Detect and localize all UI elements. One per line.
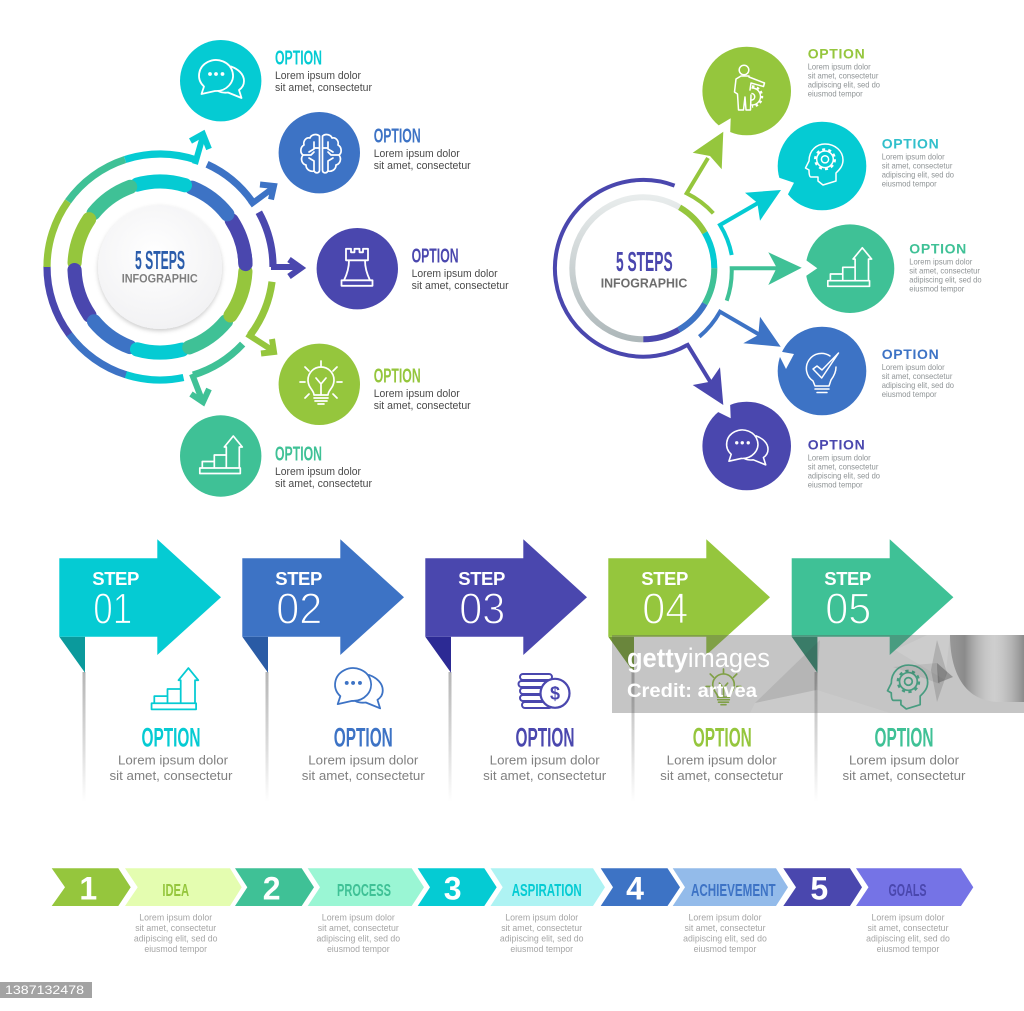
- option 3 text: Lorem ipsum dolor: [412, 268, 498, 280]
- step 1: OPTION: [142, 723, 200, 753]
- step 3: $: [550, 684, 560, 704]
- chevron 4 achievement: eiusmod tempor: [694, 944, 756, 955]
- node 5 text: eiusmod tempor: [808, 480, 863, 490]
- arrow: to node 1: [687, 132, 723, 213]
- step 2: OPTION: [334, 723, 393, 753]
- step 1: 01: [93, 584, 132, 633]
- option 3 circle with rook icon: [317, 228, 398, 309]
- step 1: Lorem ipsum dolor: [118, 752, 229, 767]
- chevron 2 process: adipiscing elit, sed do: [316, 934, 400, 945]
- chevron 5 goals: eiusmod tempor: [877, 944, 939, 955]
- step 3: OPTION: [516, 723, 574, 753]
- chevron 3 aspiration: ASPIRATION: [512, 880, 582, 900]
- option 2 text: [374, 125, 471, 172]
- chevron 5 goals: adipiscing elit, sed do: [866, 934, 950, 945]
- node 2 text: OPTION: [882, 135, 939, 151]
- chevron 5 goals: sit amet, consectetur: [868, 923, 948, 934]
- step 4: OPTION: [693, 723, 752, 753]
- node 3 text: OPTION: [909, 241, 966, 257]
- step 5: sit amet, consectetur: [842, 768, 966, 783]
- option 3 text: [412, 244, 509, 292]
- chevron 3 aspiration: 3: [444, 870, 462, 906]
- panel: circular diagram left: [0, 40, 509, 497]
- option 5 text: OPTION: [275, 443, 322, 466]
- node 3 circle with chart icon: [803, 224, 894, 313]
- chevron 4 achievement: 4: [626, 870, 644, 906]
- step 2: [242, 539, 425, 802]
- chevron 2 process: eiusmod tempor: [327, 944, 390, 955]
- chevron 2 process: [235, 868, 424, 955]
- node 4 text: [882, 346, 954, 399]
- chevron 2 process: Lorem ipsum dolor: [322, 913, 395, 924]
- option 5 text: sit amet, consectetur: [275, 478, 372, 490]
- chevron 1 idea: sit amet, consectetur: [135, 923, 216, 934]
- chevron 3 aspiration: sit amet, consectetur: [501, 923, 582, 934]
- step 5: Lorem ipsum dolor: [849, 752, 960, 767]
- chevron 4 achievement: Lorem ipsum dolor: [688, 913, 762, 924]
- node 4 circle with check bulb icon: [777, 327, 866, 415]
- node 3 text: eiusmod tempor: [909, 284, 965, 294]
- step 4: 04: [642, 584, 688, 633]
- step 3: [425, 539, 607, 802]
- chevron 1 idea: [52, 868, 242, 955]
- chevron 4 achievement: sit amet, consectetur: [684, 923, 766, 934]
- chevron 5 goals: GOALS: [888, 880, 926, 900]
- option 4 text: [374, 365, 471, 412]
- node 2 circle with head gear icon: [777, 122, 866, 210]
- step 5: 05: [825, 584, 871, 633]
- step 3: 03: [459, 584, 505, 633]
- option 5 text: Lorem ipsum dolor: [275, 466, 361, 478]
- step 3: STEP: [458, 568, 505, 589]
- option 3 text: OPTION: [412, 244, 459, 267]
- option 5 circle with chart icon: [180, 415, 261, 497]
- node 5 text: OPTION: [808, 437, 865, 453]
- node 1 text: Lorem ipsum dolor: [808, 61, 871, 71]
- right ring: [523, 148, 764, 389]
- image id tag: 1387132478: [5, 985, 84, 997]
- right center title: [601, 246, 688, 290]
- chevron 4 achievement: ACHIEVEMENT: [691, 880, 776, 900]
- option 4 text: OPTION: [374, 365, 421, 388]
- step 4: STEP: [641, 568, 688, 589]
- arrow: to option 5: [191, 374, 209, 402]
- node 2 text: Lorem ipsum dolor: [882, 151, 945, 161]
- chevron 1 idea: Lorem ipsum dolor: [139, 913, 212, 924]
- node 3 text: adipiscing elit, sed do: [909, 275, 982, 285]
- center disc: [98, 205, 222, 329]
- chevron 1 idea: adipiscing elit, sed do: [134, 934, 218, 945]
- option 1 text: OPTION: [275, 46, 322, 69]
- step 1: sit amet, consectetur: [110, 768, 233, 783]
- step 1: [59, 539, 233, 802]
- chevron 3 aspiration: eiusmod tempor: [510, 944, 573, 955]
- chevron 1 idea: 1: [79, 870, 97, 906]
- chevron 3 aspiration: adipiscing elit, sed do: [500, 934, 584, 945]
- outer ring segments: [0, 107, 320, 427]
- node 3 text: sit amet, consectetur: [909, 266, 980, 276]
- node 4 text: OPTION: [882, 346, 939, 362]
- chevron 2 process: PROCESS: [337, 880, 391, 900]
- option 2 text: OPTION: [374, 125, 421, 148]
- chevron 3 aspiration: [418, 868, 605, 955]
- node 2 text: sit amet, consectetur: [882, 160, 953, 170]
- node 5 text: adipiscing elit, sed do: [808, 471, 880, 481]
- node 1 text: OPTION: [808, 45, 865, 61]
- chevron 5 goals: 5: [810, 870, 828, 906]
- arrow: to node 3: [727, 252, 802, 301]
- watermark text: Credit: artvea: [627, 681, 757, 702]
- arrow: to option 4: [247, 334, 274, 354]
- node 3 text: Lorem ipsum dolor: [909, 257, 973, 267]
- option 2 circle with brain icon: [279, 112, 360, 193]
- step 2: Lorem ipsum dolor: [308, 752, 419, 767]
- option 1 text: sit amet, consectetur: [275, 82, 372, 94]
- option 1 circle with chat icon: [180, 40, 261, 121]
- option 1 text: [275, 46, 372, 94]
- center title: [122, 245, 198, 286]
- chevron 5 goals: [783, 868, 973, 955]
- chevron 5 goals: Lorem ipsum dolor: [872, 913, 944, 924]
- step 3: sit amet, consectetur: [483, 768, 607, 783]
- chevron 4 achievement: [601, 868, 788, 955]
- node 1 circle with person icon: [702, 47, 791, 138]
- chevron 4 achievement: adipiscing elit, sed do: [683, 934, 767, 945]
- node 1 text: adipiscing elit, sed do: [808, 79, 880, 89]
- option 4 text: sit amet, consectetur: [374, 400, 471, 412]
- step 3: Lorem ipsum dolor: [490, 752, 600, 767]
- panel: chevron timeline: [52, 868, 973, 955]
- chevron 2 process: sit amet, consectetur: [318, 923, 399, 934]
- node 4 text: adipiscing elit, sed do: [882, 380, 954, 390]
- chevron 1 idea: eiusmod tempor: [144, 944, 207, 955]
- chevron 1 idea: IDEA: [162, 880, 189, 900]
- node 4 text: eiusmod tempor: [882, 389, 937, 399]
- node 2 text: [882, 135, 954, 188]
- node 5 text: [808, 437, 880, 490]
- node 5 text: sit amet, consectetur: [808, 462, 879, 472]
- arrow: to node 5: [687, 343, 723, 405]
- option 5 text: [275, 443, 372, 490]
- panel: step arrows row: [59, 539, 966, 802]
- step 2: sit amet, consectetur: [302, 768, 425, 783]
- step 4: sit amet, consectetur: [660, 768, 784, 783]
- right center title: 5 STEPS: [616, 246, 673, 277]
- option 4 circle with bulb icon: [279, 344, 360, 425]
- node 5 text: Lorem ipsum dolor: [808, 453, 871, 463]
- option 2 text: sit amet, consectetur: [374, 160, 471, 172]
- step 4: Lorem ipsum dolor: [667, 752, 777, 767]
- arrow: up to option 1: [190, 134, 209, 164]
- right center title: INFOGRAPHIC: [601, 275, 688, 290]
- option 2 text: Lorem ipsum dolor: [374, 148, 460, 160]
- option 3 text: sit amet, consectetur: [412, 280, 509, 292]
- chevron 2 process: 2: [263, 870, 281, 906]
- arrow: to node 4: [699, 312, 781, 347]
- node 4 text: Lorem ipsum dolor: [882, 362, 945, 372]
- image id tag: [0, 982, 92, 998]
- center title: 5 STEPS: [135, 245, 185, 275]
- panel: circular diagram right: [523, 45, 982, 490]
- node 5 circle with chat icon: [702, 401, 791, 490]
- node 2 text: eiusmod tempor: [882, 178, 937, 188]
- node 1 text: sit amet, consectetur: [808, 70, 879, 80]
- watermark banner: [612, 635, 1024, 713]
- watermark text: [627, 643, 770, 702]
- arrow: to option 2: [250, 184, 274, 205]
- step 5: OPTION: [874, 723, 934, 753]
- step 5: STEP: [824, 568, 871, 589]
- step 5: [792, 539, 966, 802]
- watermark text: gettyimages: [627, 643, 770, 673]
- node 3 text: [909, 241, 982, 294]
- option 1 text: Lorem ipsum dolor: [275, 70, 361, 82]
- arrow: to option 3: [271, 260, 301, 276]
- center title: INFOGRAPHIC: [122, 274, 198, 286]
- step 4: [608, 539, 784, 802]
- step 2: 02: [276, 584, 322, 633]
- inner ring segments: [40, 147, 280, 387]
- node 4 text: sit amet, consectetur: [882, 371, 953, 381]
- node 1 text: [808, 45, 880, 98]
- chevron 3 aspiration: Lorem ipsum dolor: [505, 913, 578, 924]
- node 2 text: adipiscing elit, sed do: [882, 169, 954, 179]
- node 1 text: eiusmod tempor: [808, 88, 863, 98]
- step 1: STEP: [92, 568, 139, 589]
- arrow: to node 2: [720, 190, 781, 255]
- option 4 text: Lorem ipsum dolor: [374, 388, 460, 400]
- step 2: STEP: [275, 568, 322, 589]
